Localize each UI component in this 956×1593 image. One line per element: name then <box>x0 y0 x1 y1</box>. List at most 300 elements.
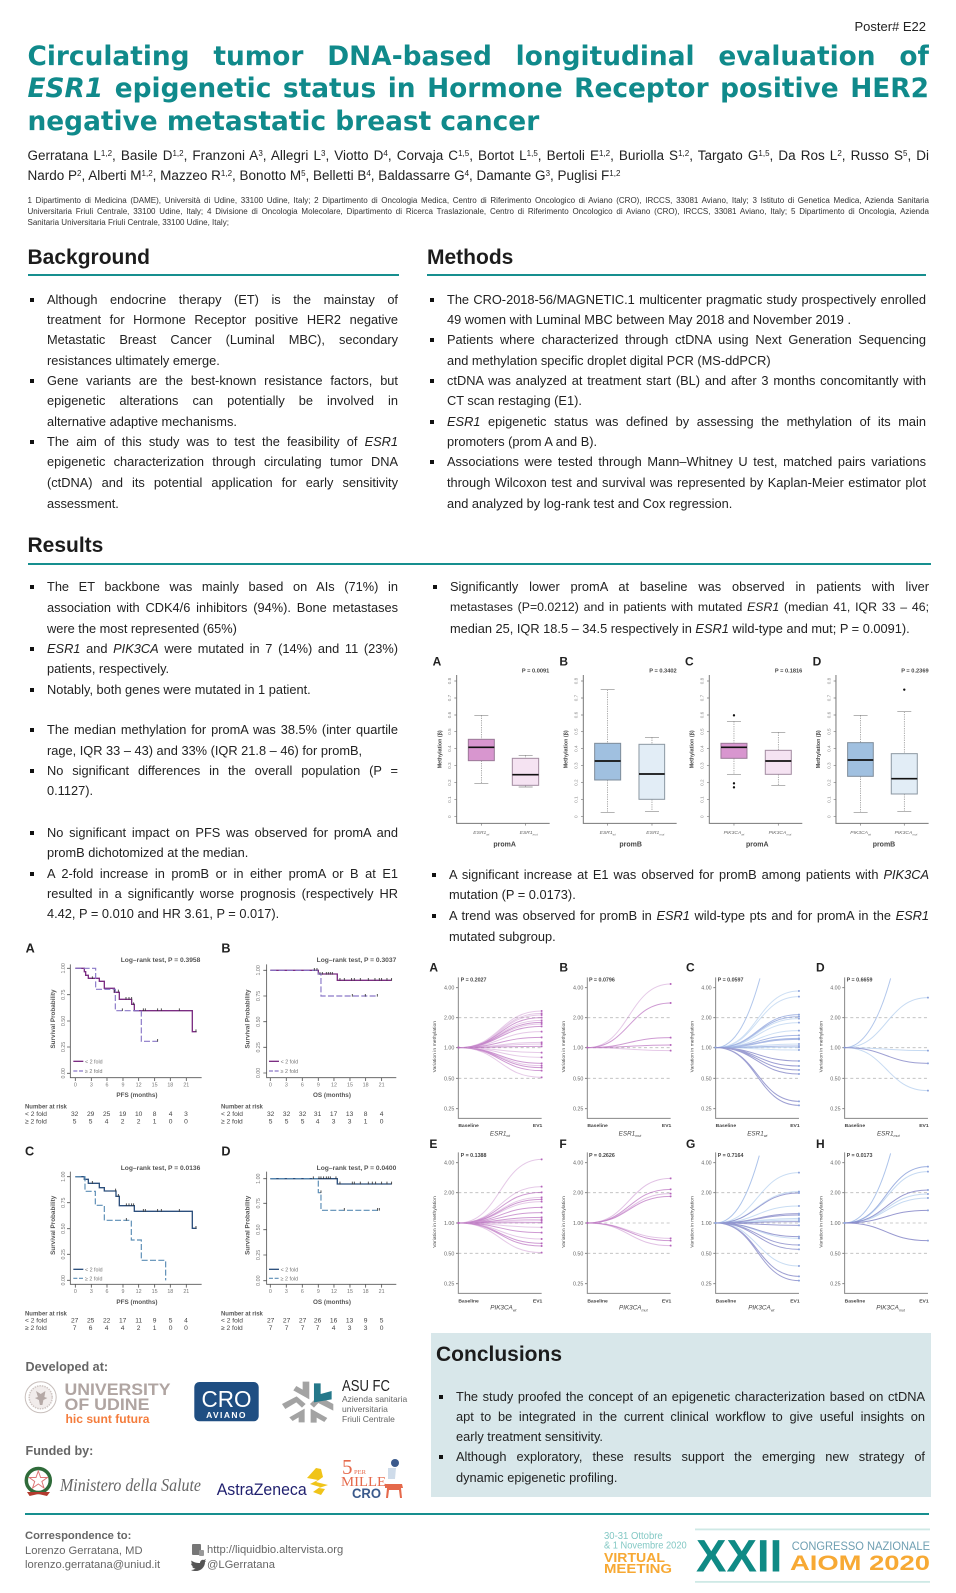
line chart C: 0.25 <box>701 1107 712 1113</box>
panel: results text left: A 2-fold increase in promB or in either promA or B at E1 <box>47 866 398 880</box>
KM chart C: 7 <box>73 1325 77 1332</box>
boxplot B: 0.6 <box>574 711 579 718</box>
line chart A: P = 0.2027 <box>461 978 487 984</box>
KM chart D: Log–rank test, P = 0.0400 <box>317 1165 397 1172</box>
KM chart A: Number at risk <box>25 1105 68 1111</box>
bottom rule <box>25 1513 929 1515</box>
KM chart B: 32 <box>267 1111 275 1118</box>
KM chart D: 0.50 <box>256 1224 262 1235</box>
KM chart B: < 2 fold <box>281 1060 298 1066</box>
panel: background text: treatment for Hormone Receptor positive HER2 negative <box>47 312 398 327</box>
KM chart A: 8 <box>153 1111 157 1118</box>
logo: University of Udine: hic sunt futura <box>66 1414 150 1426</box>
boxplot D: 0.7 <box>826 694 831 701</box>
correspondence <box>25 1530 160 1571</box>
conclusions text: early treatment sensitivity. <box>456 1429 603 1444</box>
KM chart B: 3 <box>332 1119 336 1126</box>
line chart C <box>686 960 800 1129</box>
logo: CRO Aviano: AVIANO <box>206 1410 247 1420</box>
KM chart B: 0.25 <box>256 1042 262 1053</box>
KM chart D: 0.75 <box>256 1198 262 1209</box>
panel: background text: Metastatic Breast Cancer (Luminal MBC), secondary <box>47 332 398 347</box>
boxplot C: 0.6 <box>700 711 705 718</box>
line chart H: Baseline <box>845 1298 865 1304</box>
panel: methods text: 49 women with Luminal MBC between May 2018 and November 2019 . <box>447 312 851 327</box>
logo: AIOM 2020 congress: VIRTUAL <box>604 1551 665 1565</box>
line chart group labels, row 2: wt <box>513 1308 517 1312</box>
boxplot A: mut <box>533 832 538 836</box>
KM chart A: 5 <box>89 1119 93 1126</box>
KM chart B: 1.00 <box>256 965 262 976</box>
KM chart B: 1 <box>364 1119 368 1126</box>
KM chart C: 25 <box>87 1318 95 1325</box>
KM chart A: 0.00 <box>61 1068 67 1079</box>
panel: results text left <box>30 579 398 921</box>
KM chart D: OS (months) <box>313 1299 351 1306</box>
KM chart B: 18 <box>363 1082 369 1088</box>
KM chart B: 15 <box>347 1082 353 1088</box>
KM chart D: 0.00 <box>256 1275 262 1286</box>
KM chart A: 4 <box>169 1111 173 1118</box>
KM chart C: 15 <box>152 1289 158 1295</box>
KM chart C: C <box>25 1145 34 1159</box>
KM chart B: 5 <box>301 1119 305 1126</box>
line chart group labels, row 2: mut <box>899 1308 906 1312</box>
contact links <box>207 1544 343 1570</box>
line chart C: Variation in methylation <box>689 1021 695 1072</box>
boxplot A: 0.4 <box>447 745 452 752</box>
KM chart D: Survival Probability <box>244 1195 251 1255</box>
KM chart B: ≥ 2 fold <box>281 1069 298 1075</box>
KM chart A: 4 <box>105 1119 109 1126</box>
boxplot D: 0.6 <box>826 711 831 718</box>
KM chart D: ≥ 2 fold <box>221 1325 243 1332</box>
KM chart D: 0.25 <box>256 1250 262 1260</box>
KM chart A: 1.00 <box>61 963 67 974</box>
panel: background text: resistances ultimately emerge. <box>47 353 220 368</box>
line chart D: 0.50 <box>830 1076 841 1082</box>
contact links: http://liquidbio.altervista.org <box>207 1544 343 1556</box>
boxplot A: 0.3 <box>447 762 452 769</box>
panel: methods text: promoters (prom A and B). <box>447 434 597 449</box>
KM chart D: Number at risk <box>221 1312 264 1318</box>
KM chart D: 4 <box>332 1325 336 1332</box>
line chart G: 4.00 <box>701 1161 712 1167</box>
KM chart B: 0 <box>380 1119 384 1126</box>
line chart H: P = 0.0173 <box>847 1153 872 1159</box>
conclusions text: apt to be integrated in the current clinical workflow to give useful insights on <box>456 1409 925 1424</box>
boxplot B: P = 0.3402 <box>649 669 677 675</box>
line chart group labels, row 1: ESR1 <box>619 1130 635 1137</box>
authors: Gerratana L1,2, Basile D1,2, Franzoni A3, Allegri L3, Viotto D4, Corvaja C1,5, Bortot L1,5, Bertoli E1,2, Buriolla S1,2, Targato G1,5, Da Ros L2, Russo S5, Di <box>28 148 929 163</box>
boxplot B: mut <box>659 832 664 836</box>
KM chart C: PFS (months) <box>116 1299 158 1306</box>
line chart D: 1.00 <box>830 1046 841 1052</box>
KM chart D: 27 <box>299 1318 307 1325</box>
boxplot D: PIK3CA <box>850 830 868 836</box>
line chart B: 0.25 <box>573 1107 583 1113</box>
KM chart C: 9 <box>153 1318 157 1325</box>
KM chart C: Survival Probability <box>50 1195 57 1255</box>
KM chart C: 22 <box>103 1318 111 1325</box>
line chart B: 1.00 <box>573 1046 583 1052</box>
line chart E: E <box>429 1137 437 1151</box>
title: Circulating tumor DNA-based longitudinal evaluation of <box>28 41 929 72</box>
KM chart C: 0.00 <box>61 1275 67 1286</box>
KM chart D: D <box>221 1145 230 1159</box>
boxplot C: 0.4 <box>700 745 705 752</box>
panel: methods text: through Wilcoxon test and survival was represented by Kaplan-Meier estimator plot <box>447 475 926 490</box>
panel: results text left: No significant differences in the overall population (P = <box>47 763 398 778</box>
line chart H: 0.25 <box>830 1282 841 1288</box>
line chart group labels, row 1: mut <box>635 1134 642 1138</box>
line chart C: 2.00 <box>701 1016 712 1022</box>
line chart group labels, row 2: PIK3CA <box>619 1305 642 1312</box>
boxplot D: 0.4 <box>826 745 831 752</box>
boxplot C: PIK3CA <box>769 830 786 836</box>
logo: 5 per mille CRO: CRO <box>352 1485 381 1501</box>
icon: twitter <box>191 1559 206 1571</box>
boxplot D: wt <box>868 832 871 836</box>
KM chart D: 7 <box>316 1325 320 1332</box>
logo: University of Udine <box>25 1380 171 1426</box>
KM chart B: B <box>221 942 230 956</box>
boxplot C: P = 0.1816 <box>775 669 802 675</box>
panel: methods text: and methylation specific droplet digital PCR (MS-ddPCR) <box>447 353 771 368</box>
authors: Nardo P2, Alberti M1,2, Mazzeo R1,2, Bonotto M5, Belletti B4, Baldassarre G4, Damante G3, Puglisi F1,2 <box>28 168 620 182</box>
KM chart A: 0 <box>184 1119 188 1126</box>
KM chart D: < 2 fold <box>281 1267 298 1273</box>
line chart C: Baseline <box>716 1123 736 1129</box>
KM chart C: 9 <box>122 1289 125 1295</box>
boxplot A: 0.7 <box>447 694 452 701</box>
boxplot B <box>559 655 677 848</box>
panel: background text <box>30 292 398 511</box>
KM chart A: 2 <box>137 1119 141 1126</box>
line chart F: 0.50 <box>573 1251 583 1257</box>
line chart E <box>429 1137 543 1304</box>
boxplot C: 0.3 <box>700 762 705 769</box>
line chart F: 4.00 <box>573 1161 583 1167</box>
KM chart A: 0 <box>169 1119 173 1126</box>
logo: University of Udine: UNIVERSITY <box>64 1380 171 1399</box>
panel: results text left: No significant impact on PFS was observed for promA and <box>47 825 398 840</box>
line chart E: 0.50 <box>444 1251 454 1257</box>
KM chart A: 25 <box>103 1111 111 1118</box>
KM chart D: 26 <box>314 1318 322 1325</box>
KM chart C: < 2 fold <box>25 1318 47 1325</box>
heading: Methods: Methods <box>427 246 513 269</box>
KM chart B: 21 <box>379 1082 385 1088</box>
boxplot A: 0.1 <box>447 796 452 803</box>
line chart A: Variation in methylation <box>432 1021 438 1072</box>
KM chart A: 0.50 <box>61 1016 67 1026</box>
boxplot A: promA <box>493 841 516 848</box>
line chart C: C <box>686 960 695 974</box>
boxplot B: 0.5 <box>574 728 579 735</box>
line chart F: 2.00 <box>573 1191 583 1197</box>
line chart D: P = 0.6659 <box>847 978 872 984</box>
boxplot C: 0.8 <box>700 677 705 684</box>
boxplot A: A <box>433 655 442 669</box>
KM chart A: 29 <box>87 1111 95 1118</box>
panel: methods text <box>430 292 926 511</box>
boxplot C: 0.7 <box>700 694 705 701</box>
panel: results text right top: median 25, IQR 18.5 – 34.5 respectively in ESR1 wild-type and mut; P = 0.0091). <box>450 621 910 636</box>
KM chart D: 3 <box>348 1325 352 1332</box>
line chart F: F <box>559 1137 567 1151</box>
line chart E: 0.25 <box>444 1282 454 1288</box>
affiliations: 1 Dipartimento di Medicina (DAME), Università di Udine, 33100 Udine, Italy; 2 Dipartimento di Oncologia Medica, Centro di Riferimento Oncologico di Aviano (CRO), IRCCS, 33081 Aviano, Italy; 3 Istituto di Genetica Medica, Azienda Sanitaria <box>28 196 929 205</box>
heading: funded by: Funded by: <box>26 1444 93 1458</box>
boxplot D: 0.3 <box>826 762 831 769</box>
panel: results text right middle <box>432 866 929 944</box>
boxplot D: 0 <box>826 815 831 818</box>
KM chart C: 1.00 <box>61 1171 67 1182</box>
line chart E: 1.00 <box>444 1221 454 1227</box>
panel: results text left: 0.1127). <box>47 783 93 798</box>
conclusions text: The study proofed the concept of an epigenetic characterization based on ctDNA <box>456 1389 925 1404</box>
KM chart B: 12 <box>331 1082 337 1088</box>
logo: AIOM 2020 congress: XXII <box>696 1531 782 1582</box>
panel: results text left: rage, IQR 33 – 43) and 33% (IQR 21.8 – 46) for promB, <box>47 743 362 758</box>
KM chart C: 0 <box>184 1325 188 1332</box>
logo: University of Udine: OF UDINE <box>64 1395 150 1414</box>
KM chart A: 1 <box>153 1119 157 1126</box>
boxplot C: 0.1 <box>700 796 705 803</box>
KM chart B: 6 <box>301 1082 304 1088</box>
logo: 5 per mille CRO: 5 <box>342 1455 352 1479</box>
KM chart D: 15 <box>347 1289 353 1295</box>
logo: ASU FC <box>282 1378 407 1424</box>
line chart A: 1.00 <box>444 1046 454 1052</box>
KM chart A: 2 <box>121 1119 125 1126</box>
line chart B: Variation in methylation <box>561 1021 567 1072</box>
line chart A: A <box>429 960 438 974</box>
line chart group labels, row 2: PIK3CA <box>490 1305 513 1312</box>
KM chart D: 12 <box>331 1289 337 1295</box>
line chart F: EV1 <box>662 1298 672 1304</box>
KM chart C: 21 <box>183 1289 189 1295</box>
panel: methods text: and analyzed by log-rank test and Cox regression. <box>447 496 732 511</box>
line chart B: 4.00 <box>573 986 583 992</box>
line chart G: 0.25 <box>701 1282 712 1288</box>
panel: background text: The aim of this study was to test the feasibility of ESR1 <box>47 434 398 449</box>
boxplot A: Methylation (β) <box>437 730 443 768</box>
KM chart D: 5 <box>380 1318 384 1325</box>
line chart C: 4.00 <box>701 986 712 992</box>
KM chart B: Number at risk <box>221 1105 264 1111</box>
KM chart B: Survival Probability <box>244 989 251 1049</box>
logo: AIOM 2020 congress: 30-31 Ottobre <box>604 1531 663 1542</box>
boxplot B: wt <box>613 832 616 836</box>
panel: results text left: Notably, both genes were mutated in 1 patient. <box>47 682 311 697</box>
boxplot D: D <box>813 655 822 669</box>
line chart D: 0.25 <box>830 1107 841 1113</box>
KM chart C: 0.75 <box>61 1197 67 1208</box>
line chart G: G <box>686 1137 695 1151</box>
line chart group labels, row 1: ESR1 <box>490 1130 506 1137</box>
KM chart C: 11 <box>135 1318 142 1325</box>
line chart A: 4.00 <box>444 986 454 992</box>
title <box>28 41 929 137</box>
poster number: Poster# E22 <box>854 19 926 34</box>
line chart H: 4.00 <box>830 1161 841 1167</box>
line chart D: Baseline <box>845 1123 865 1129</box>
logo: AstraZeneca: AstraZeneca <box>217 1480 307 1499</box>
line chart H: 2.00 <box>830 1191 841 1197</box>
KM chart C: 27 <box>71 1318 79 1325</box>
boxplot D <box>813 655 929 848</box>
KM chart A: 3 <box>90 1082 93 1088</box>
heading: developed at: Developed at: <box>26 1360 108 1374</box>
KM chart B: 4 <box>316 1119 320 1126</box>
panel: results text right middle: A significant increase at E1 was observed for promB among patients with PIK3CA <box>449 866 929 882</box>
KM chart A: ≥ 2 fold <box>25 1119 47 1126</box>
panel: methods text: The CRO-2018-56/MAGNETIC.1 multicenter pragmatic study prospectively enrolled <box>447 292 926 307</box>
KM chart D: 3 <box>364 1325 368 1332</box>
panel: background text: epigenetic characterization through circulating tumor DNA <box>47 454 398 469</box>
boxplot C: Methylation (β) <box>689 730 695 768</box>
logo: Ministero della Salute <box>26 1468 201 1496</box>
KM chart C: 0 <box>169 1325 173 1332</box>
panel: methods text: Associations were tested through Mann–Whitney U test, matched pairs variations <box>447 454 926 469</box>
title: ESR1 epigenetic status in Hormone Receptor positive HER2 <box>28 73 929 104</box>
KM chart B: 0.50 <box>256 1016 262 1027</box>
boxplot A: 0.8 <box>447 677 452 684</box>
line chart group labels, row 1: mut <box>893 1134 901 1138</box>
boxplot B: 0.7 <box>574 694 579 701</box>
line chart B: EV1 <box>662 1123 672 1129</box>
line chart group labels, row 1 <box>490 1130 901 1138</box>
line chart D: EV1 <box>919 1123 929 1129</box>
boxplot D: 0.1 <box>826 796 831 803</box>
boxplot C: C <box>685 655 694 669</box>
line chart B <box>559 960 672 1129</box>
heading: Conclusions: Conclusions <box>436 1343 562 1366</box>
KM chart C <box>25 1145 202 1332</box>
logo: AIOM 2020 congress: & 1 Novembre 2020 <box>604 1540 687 1552</box>
logo: 5 per mille CRO <box>341 1455 403 1501</box>
line chart E: EV1 <box>533 1298 543 1304</box>
boxplot B: B <box>559 655 568 669</box>
boxplot C: PIK3CA <box>724 830 741 836</box>
KM chart D: 27 <box>283 1318 291 1325</box>
line chart G: 1.00 <box>701 1221 712 1227</box>
boxplot C: 0.5 <box>700 728 705 735</box>
panel: methods text: Patients where characterized through ctDNA using Next Generation Sequencing <box>447 332 926 347</box>
line chart G: P = 0.7164 <box>718 1153 744 1159</box>
KM chart D: 1.00 <box>256 1173 262 1184</box>
line chart D <box>816 960 929 1129</box>
line chart B: B <box>559 960 568 974</box>
boxplot A: 0.6 <box>447 711 452 718</box>
panel: results text right middle: mutation (P = 0.0173). <box>449 887 576 902</box>
KM chart B: 0.75 <box>256 991 262 1001</box>
line chart group labels, row 1: ESR1 <box>747 1130 764 1137</box>
KM chart D: 0 <box>269 1289 272 1295</box>
panel: conclusions <box>431 1333 931 1497</box>
line chart A: 0.50 <box>444 1076 454 1082</box>
KM chart C: 5 <box>169 1318 173 1325</box>
icon: server <box>192 1544 204 1556</box>
boxplot A <box>433 655 550 848</box>
KM chart C: 0 <box>74 1289 77 1295</box>
KM chart A: 9 <box>122 1082 125 1088</box>
KM chart D: 9 <box>364 1318 368 1325</box>
KM chart C: Log–rank test, P = 0.0136 <box>121 1165 201 1172</box>
KM chart C: 6 <box>106 1289 109 1295</box>
logo: ASU FC: Friuli Centrale <box>342 1414 395 1424</box>
line chart E: 4.00 <box>444 1161 454 1167</box>
panel: results text left: promB dichotomized at the median. <box>47 845 248 860</box>
affiliations: Universitaria Friuli Centrale, 33100 Udine, Italy; 4 Divisione di Oncologia Molecolare, Dipartimento di Ricerca Traslazionale, Centro di Riferimento Oncologico di Aviano (CRO), IRCCS, 33081 Aviano, Italy; 5 Dipartimento di Oncologia, Azienda <box>28 207 929 216</box>
line chart F: Variation in methylation <box>561 1196 567 1248</box>
boxplot C: mut <box>786 832 791 836</box>
boxplot D: PIK3CA <box>895 830 912 836</box>
correspondence: Lorenzo Gerratana, MD <box>25 1544 143 1556</box>
line chart E: Baseline <box>458 1298 479 1304</box>
panel: results text left: association with CDK4/6 inhibitors (94%). Bone metastases <box>47 600 398 615</box>
panel: background text: Gene variants are the best-known resistance factors, but <box>47 373 398 388</box>
line chart group labels, row 2: wt <box>771 1308 775 1312</box>
line chart G: Baseline <box>716 1298 736 1304</box>
KM chart B: OS (months) <box>313 1092 351 1099</box>
panel: results text left: resulted in a significantly worse prognosis (respectively HR <box>47 886 398 901</box>
KM chart B: 5 <box>285 1119 289 1126</box>
line chart B: P = 0.0796 <box>589 978 615 984</box>
KM chart A: < 2 fold <box>25 1111 47 1118</box>
panel: results text right top <box>433 579 929 636</box>
boxplot C <box>685 655 802 848</box>
line chart G: 2.00 <box>701 1191 712 1197</box>
KM chart D: 0 <box>380 1325 384 1332</box>
boxplot D: Methylation (β) <box>816 730 822 768</box>
KM chart B: 13 <box>346 1111 354 1118</box>
KM chart A: 6 <box>106 1082 109 1088</box>
boxplot D: P = 0.2369 <box>901 669 929 675</box>
KM chart A: PFS (months) <box>116 1092 158 1099</box>
line chart F <box>559 1137 672 1304</box>
KM chart C: 4 <box>184 1318 188 1325</box>
boxplot B: ESR1 <box>600 830 613 836</box>
KM chart D: ≥ 2 fold <box>281 1276 298 1282</box>
conclusions text: Although exploratory, these results support the emerging new strategy of <box>456 1449 925 1464</box>
KM chart B: < 2 fold <box>221 1111 243 1118</box>
panel: results text left: 4.42, P = 0.010 and HR 3.61, P = 0.017). <box>47 906 279 921</box>
contact links: @LGerratana <box>207 1558 275 1570</box>
boxplot A: 0 <box>447 815 452 818</box>
KM chart A: Survival Probability <box>50 989 57 1049</box>
logo: AIOM 2020 congress: CONGRESSO NAZIONALE <box>792 1541 930 1553</box>
KM chart B: 31 <box>314 1111 322 1118</box>
KM chart C: 17 <box>119 1318 127 1325</box>
boxplot C: 0.2 <box>700 779 705 786</box>
line chart D: 2.00 <box>830 1016 841 1022</box>
boxplot D: 0.2 <box>826 779 831 786</box>
line chart A <box>429 960 543 1129</box>
line chart E: P = 0.1388 <box>461 1153 487 1159</box>
KM chart A: A <box>26 942 35 956</box>
boxplot C: wt <box>741 832 744 836</box>
KM chart B <box>221 942 397 1126</box>
KM chart D: 27 <box>267 1318 275 1325</box>
panel: results text right middle: A trend was observed for promB in ESR1 wild-type pts and for promA in the ESR1 <box>449 908 929 923</box>
affiliations <box>28 196 929 227</box>
authors <box>28 148 929 183</box>
boxplot D: 0.8 <box>826 677 831 684</box>
KM chart B: 17 <box>330 1111 338 1118</box>
